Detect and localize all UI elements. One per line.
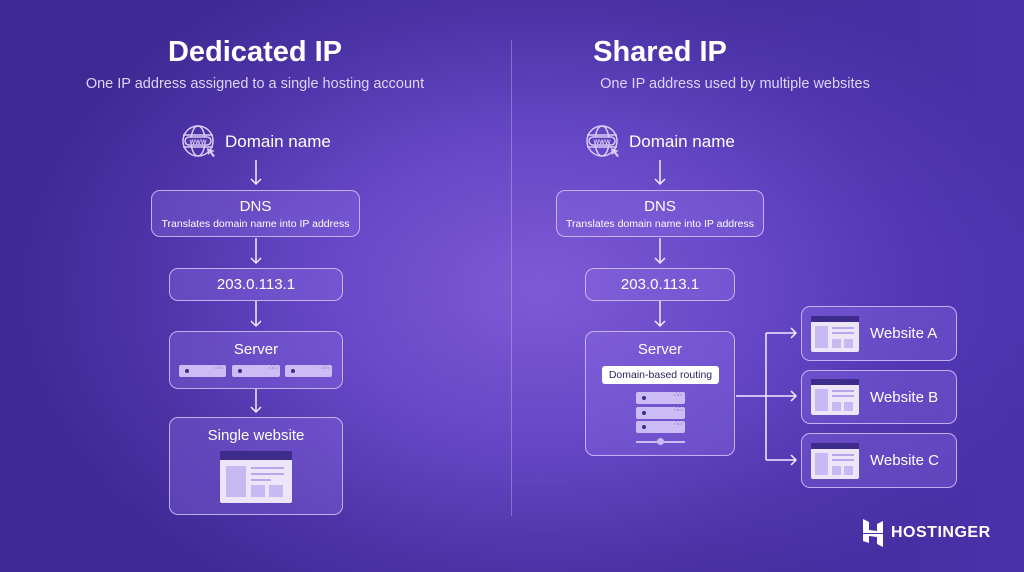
box: IP right: 203.0.113.1	[621, 276, 699, 293]
box: DNS right: DNS	[644, 198, 676, 215]
subtitle: shared: One IP address used by multiple websites	[600, 76, 870, 92]
box: Single website: Single website	[208, 427, 304, 444]
box: DNS left: DNS	[240, 198, 271, 215]
box: Server left	[169, 331, 343, 389]
box: Website A: Website A	[870, 325, 937, 342]
box: IP right	[585, 268, 735, 301]
icon: globe right: WWW	[594, 140, 611, 146]
background glow (right)	[700, 0, 1024, 572]
box: IP left	[169, 268, 343, 301]
icon: globe left: WWW	[190, 140, 207, 146]
icon: globe right	[586, 125, 619, 157]
box: DNS left	[151, 190, 360, 237]
logo: Hostinger: HOSTINGER	[891, 524, 991, 541]
box: DNS right: Translates domain name into IP address	[566, 218, 754, 230]
logo: Hostinger	[863, 519, 991, 547]
box: DNS right	[556, 190, 764, 237]
label: Domain-based routing	[602, 366, 719, 384]
box: DNS left: Translates domain name into IP address	[162, 218, 349, 230]
box: Server left: Server	[234, 341, 278, 358]
box: Website A	[801, 306, 957, 361]
title: Shared IP: Shared IP	[593, 36, 727, 68]
icon: website	[220, 451, 292, 503]
label: Domain-based routing: Domain-based routing	[609, 369, 712, 381]
box: IP left: 203.0.113.1	[217, 276, 295, 293]
label: Domain name right: Domain name	[629, 132, 735, 151]
box: Website C	[801, 433, 957, 488]
box: Website B	[801, 370, 957, 424]
box: Server right	[585, 331, 735, 456]
title: Dedicated IP: Dedicated IP	[168, 36, 342, 68]
box: Server right: Server	[638, 341, 682, 358]
box: Website B: Website B	[870, 389, 938, 406]
box: Single website	[169, 417, 343, 515]
box: Website C: Website C	[870, 452, 939, 469]
divider	[511, 40, 512, 516]
icon: globe left	[182, 125, 215, 157]
subtitle: dedicated: One IP address assigned to a single hosting account	[86, 76, 424, 92]
label: Domain name left: Domain name	[225, 132, 331, 151]
